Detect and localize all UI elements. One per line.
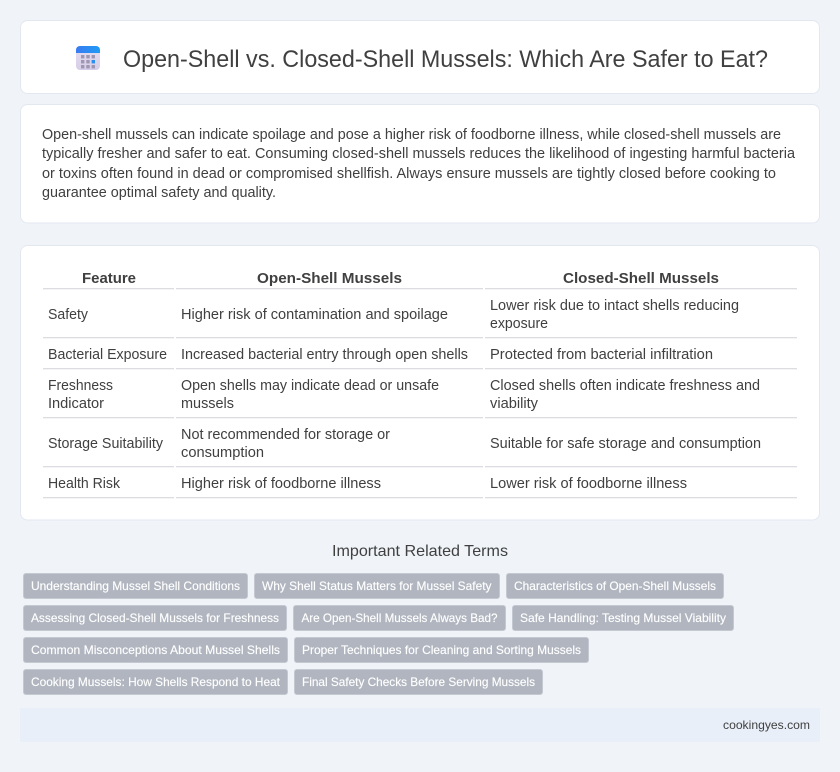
chip: Characteristics of Open-Shell Mussels [514,579,716,593]
panel: summary text: guarantee optimal safety and quality. [42,185,276,201]
chip [294,606,506,630]
row: bacterial exposure: Increased bacterial entry through open shells [181,347,468,363]
table header row [82,271,719,287]
row: health risk: Higher risk of foodborne illness [181,476,381,492]
icon: calendar [76,46,100,70]
row: safety: Lower risk due to intact shells reducing [490,298,739,314]
chip: Common Misconceptions About Mussel Shells [31,643,280,657]
chip [254,574,500,598]
table header row: Feature [82,271,136,287]
panel: summary text: or toxins often found in dead or compromised shellfish. Always ensure mussels are tightly closed before cooking to [42,166,776,182]
title: Open-Shell vs. Closed-Shell Mussels: Which Are Safer to Eat? [123,46,768,73]
chip: Final Safety Checks Before Serving Mussels [302,675,535,689]
panel: summary text [20,104,820,223]
chip: Cooking Mussels: How Shells Respond to Heat [31,675,281,689]
row: freshness indicator: Open shells may indicate dead or unsafe [181,378,439,394]
chip [24,638,288,662]
chip: Why Shell Status Matters for Mussel Safety [262,579,492,593]
table header row: Open-Shell Mussels [257,271,402,287]
row: safety: exposure [490,316,548,332]
footer: cookingyes.com [723,718,810,732]
chip: Are Open-Shell Mussels Always Bad? [302,611,498,625]
row: bacterial exposure: Protected from bacterial infiltration [490,347,713,363]
chip [294,638,588,662]
chip [512,606,734,630]
row: safety: Safety [48,307,89,323]
row: health risk [48,476,687,492]
panel: comparison table [20,246,820,520]
row: health risk: Lower risk of foodborne illness [490,476,687,492]
row: storage suitability: consumption [181,445,264,461]
panel: related term chips [24,574,734,694]
chip [24,670,288,694]
chip [24,606,286,630]
row: storage suitability [48,427,761,461]
row: freshness indicator: Indicator [48,396,104,412]
row: bacterial exposure [48,347,713,363]
panel: summary text: Open-shell mussels can indicate spoilage and pose a higher risk of foodborne illness, while closed-shell mussels are [42,127,781,143]
footer [20,708,820,742]
chip: Assessing Closed-Shell Mussels for Freshness [31,611,279,625]
panel: title header [20,20,820,94]
row: bacterial exposure: Bacterial Exposure [48,347,167,363]
panel: summary text: typically fresher and safer to eat. Consuming closed-shell mussels reduces the likelihood of ingesting harmful bacteria [42,146,795,162]
chip: Safe Handling: Testing Mussel Viability [520,611,726,625]
chip: Proper Techniques for Cleaning and Sorting Mussels [302,643,581,657]
row: storage suitability: Storage Suitability [48,436,164,452]
row: storage suitability: Suitable for safe storage and consumption [490,436,761,452]
row: storage suitability: Not recommended for storage or [181,427,390,443]
chip [24,574,248,598]
row: freshness indicator: viability [490,396,539,412]
row: freshness indicator: Closed shells often indicate freshness and [490,378,760,394]
row: freshness indicator: Freshness [48,378,113,394]
chip [506,574,724,598]
row: safety: Higher risk of contamination and spoilage [181,307,448,323]
table header row: Closed-Shell Mussels [563,271,719,287]
chip: Understanding Mussel Shell Conditions [31,579,240,593]
row: safety [48,298,739,332]
row: freshness indicator: mussels [181,396,234,412]
heading: related terms: Important Related Terms [332,543,508,560]
row: health risk: Health Risk [48,476,121,492]
chip [294,670,542,694]
row: freshness indicator [48,378,760,412]
